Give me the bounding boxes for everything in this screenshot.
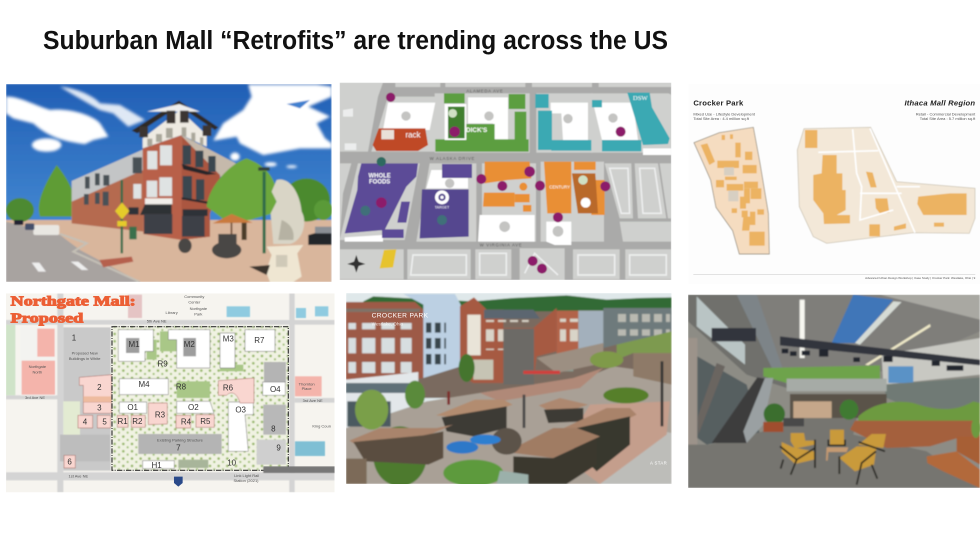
site data: Crocker Park: Mixed Use - Lifestyle Development [693, 111, 756, 116]
map: rust stores [373, 128, 428, 151]
plan: small annotations: Buildings in White [69, 356, 101, 361]
panel: retail district map: FOODS [369, 179, 390, 185]
building side wing [70, 149, 144, 218]
plan: small annotations: Northgate [29, 364, 47, 369]
panel: retail district map: DICK'S [466, 127, 487, 134]
ceiling [753, 295, 980, 371]
plan: small annotations: Existing Parking Structure [157, 437, 204, 442]
storefront [140, 204, 172, 215]
plan: pink retail buildings [64, 375, 254, 468]
heading: Northgate Mall Proposed [11, 294, 136, 327]
panel: Crocker Park and Ithaca Mall site plans [688, 84, 980, 284]
panel: Northgate Mall proposed site plan [6, 293, 335, 492]
site plan: Ithaca Mall Region [797, 127, 975, 243]
left wall and windows [688, 295, 787, 388]
plan: small annotations [25, 294, 331, 483]
plan: small annotations: 3rd Ave NE [303, 398, 323, 403]
plan: small annotations: Thornton [299, 381, 315, 386]
map: street labels: W VIRGINIA AVE [480, 243, 522, 248]
panel: retail district map: rack [405, 131, 421, 140]
site plan: Crocker Park [694, 127, 769, 254]
map: white parking lots [345, 97, 671, 245]
trees front [207, 158, 277, 222]
staircase [712, 377, 765, 443]
footer rule and caption: Advanced Urban Design Workshop | Case Study | Crocker Park: Westlake, Ohio | 9 [865, 276, 976, 280]
title: Suburban Mall “Retrofits” are trending across the US [43, 27, 668, 55]
plan: small annotations: Link Light Rail [234, 473, 259, 478]
panel: retail district map: DSW [633, 95, 648, 102]
panel: street photo of mixed-use building [6, 84, 333, 282]
ground [6, 220, 332, 282]
plan: building labels: O4 [270, 385, 281, 394]
heading: Northgate Mall Proposed: Proposed [11, 312, 84, 327]
site data: Crocker Park [693, 111, 756, 121]
coffee table [826, 447, 848, 461]
plan: small annotations: Northgate [190, 306, 208, 311]
plan: surrounding streets [6, 293, 335, 492]
trees [459, 354, 475, 382]
site data: Ithaca Mall Region: Retail - Commercial Development [916, 111, 976, 116]
plan: small annotations: Center [188, 299, 201, 304]
plan: building labels: R8 [176, 382, 187, 391]
plan: building labels: R2 [132, 417, 143, 426]
blue umbrellas [446, 441, 478, 454]
plan: building labels: 10 [227, 458, 237, 467]
plan: building labels: R1 [118, 417, 128, 426]
plan: small annotations: Place [302, 386, 312, 391]
map: street labels: W ALASKA DRIVE [430, 156, 475, 161]
panel: Crocker Park aerial photo [346, 293, 672, 486]
plan: small annotations: Station (2021) [233, 478, 259, 483]
plan: building labels: M2 [184, 340, 195, 349]
truss [780, 336, 980, 365]
plan: small annotations: Community [184, 294, 204, 299]
photo caption: CROCKER PARK [372, 313, 429, 320]
map: street labels: ALAMEDA AVE [466, 89, 503, 94]
site data: Crocker Park: Total Site Area : 4.4 million sq.ft [693, 116, 750, 121]
planters and plants [764, 403, 785, 425]
map: teal stores [535, 93, 670, 151]
kiosks [436, 400, 513, 419]
plan: small annotations: North [32, 369, 42, 374]
map: city blocks [340, 83, 671, 280]
plan: building labels: 9 [276, 444, 281, 453]
green wall [763, 365, 880, 383]
trees behind [6, 198, 34, 222]
panel: retail district map [340, 83, 671, 280]
plan: building labels: H1 [152, 461, 162, 470]
parked trucks and cars [33, 225, 59, 235]
heading: Northgate Mall Proposed: Northgate Mall: [11, 294, 136, 309]
plan: building labels [67, 334, 281, 470]
walkway and back hall [787, 379, 887, 391]
plan: white proposed buildings [118, 330, 285, 469]
plan: small annotations: Park [194, 311, 202, 316]
plan: dashed site boundary [112, 327, 288, 470]
plan: building labels: 3 [97, 404, 102, 413]
street poles and sign [121, 180, 123, 253]
site data: Ithaca Mall Region: Total Site Area : 5.7 million sq.ft [920, 116, 976, 121]
lion statue on pedestal [271, 180, 304, 244]
plan: building labels: 2 [97, 383, 102, 392]
plan: building labels: M4 [138, 380, 150, 389]
building row [346, 302, 423, 388]
plan: building labels: R4 [181, 418, 192, 427]
plan: building labels: O3 [235, 405, 247, 414]
plan: small annotations: 1st Ave NE [69, 473, 88, 478]
plan: building labels: 5 [102, 418, 107, 427]
icon: interstate 5 shield [174, 477, 183, 487]
panel: retail district map: WHOLE [369, 173, 391, 179]
plan: building labels: 7 [176, 444, 181, 453]
map: purple stores [345, 163, 418, 233]
street plaza [346, 366, 672, 484]
plan: building labels: M3 [223, 334, 234, 343]
plan: small annotations: 5th Ave NE [147, 319, 167, 324]
plan: building labels: R6 [223, 383, 234, 392]
plan: small annotations: Library [166, 310, 178, 315]
panel: interior atrium photo [688, 295, 980, 488]
plan: small annotations: King Coun [312, 423, 331, 428]
plan: building labels: R9 [158, 360, 168, 369]
map: orange stores [483, 162, 605, 215]
plan: small annotations: 3rd Ave NE [25, 395, 45, 400]
plan: site interior [112, 326, 288, 470]
panel: retail district map: CENTURY [549, 184, 570, 189]
cafe umbrella and tables [213, 214, 253, 223]
plan: small annotations: Proposed New [72, 351, 98, 356]
plan: building labels: 1 [72, 334, 77, 343]
map: green stores [435, 93, 529, 152]
building corner tower [142, 134, 183, 241]
plan: building labels: R7 [254, 336, 265, 345]
photo caption [372, 313, 667, 466]
right side [882, 338, 980, 385]
floor [688, 418, 980, 488]
site data: Ithaca Mall Region [916, 111, 976, 121]
photo caption: Westlake, Ohio [372, 322, 404, 327]
yellow lounge chairs [782, 430, 886, 471]
plan: building labels: 8 [271, 424, 276, 433]
heading: Crocker Park: Crocker Park [693, 98, 744, 107]
plan: building labels: 4 [83, 418, 88, 427]
photo caption: A STAR [650, 461, 667, 466]
plan: building labels: O2 [188, 403, 199, 412]
plan: building labels: 6 [67, 458, 72, 467]
plan: building labels: O1 [127, 403, 139, 412]
panel: retail district map: TARGET [435, 206, 450, 210]
plan: building labels: M1 [128, 340, 140, 349]
map: yellow block and compass [380, 249, 396, 268]
plan: building labels: R3 [155, 410, 166, 419]
plan: building labels: R5 [200, 417, 211, 426]
heading: Ithaca Mall Region: Ithaca Mall Region [904, 98, 975, 107]
map: street labels [430, 89, 522, 248]
